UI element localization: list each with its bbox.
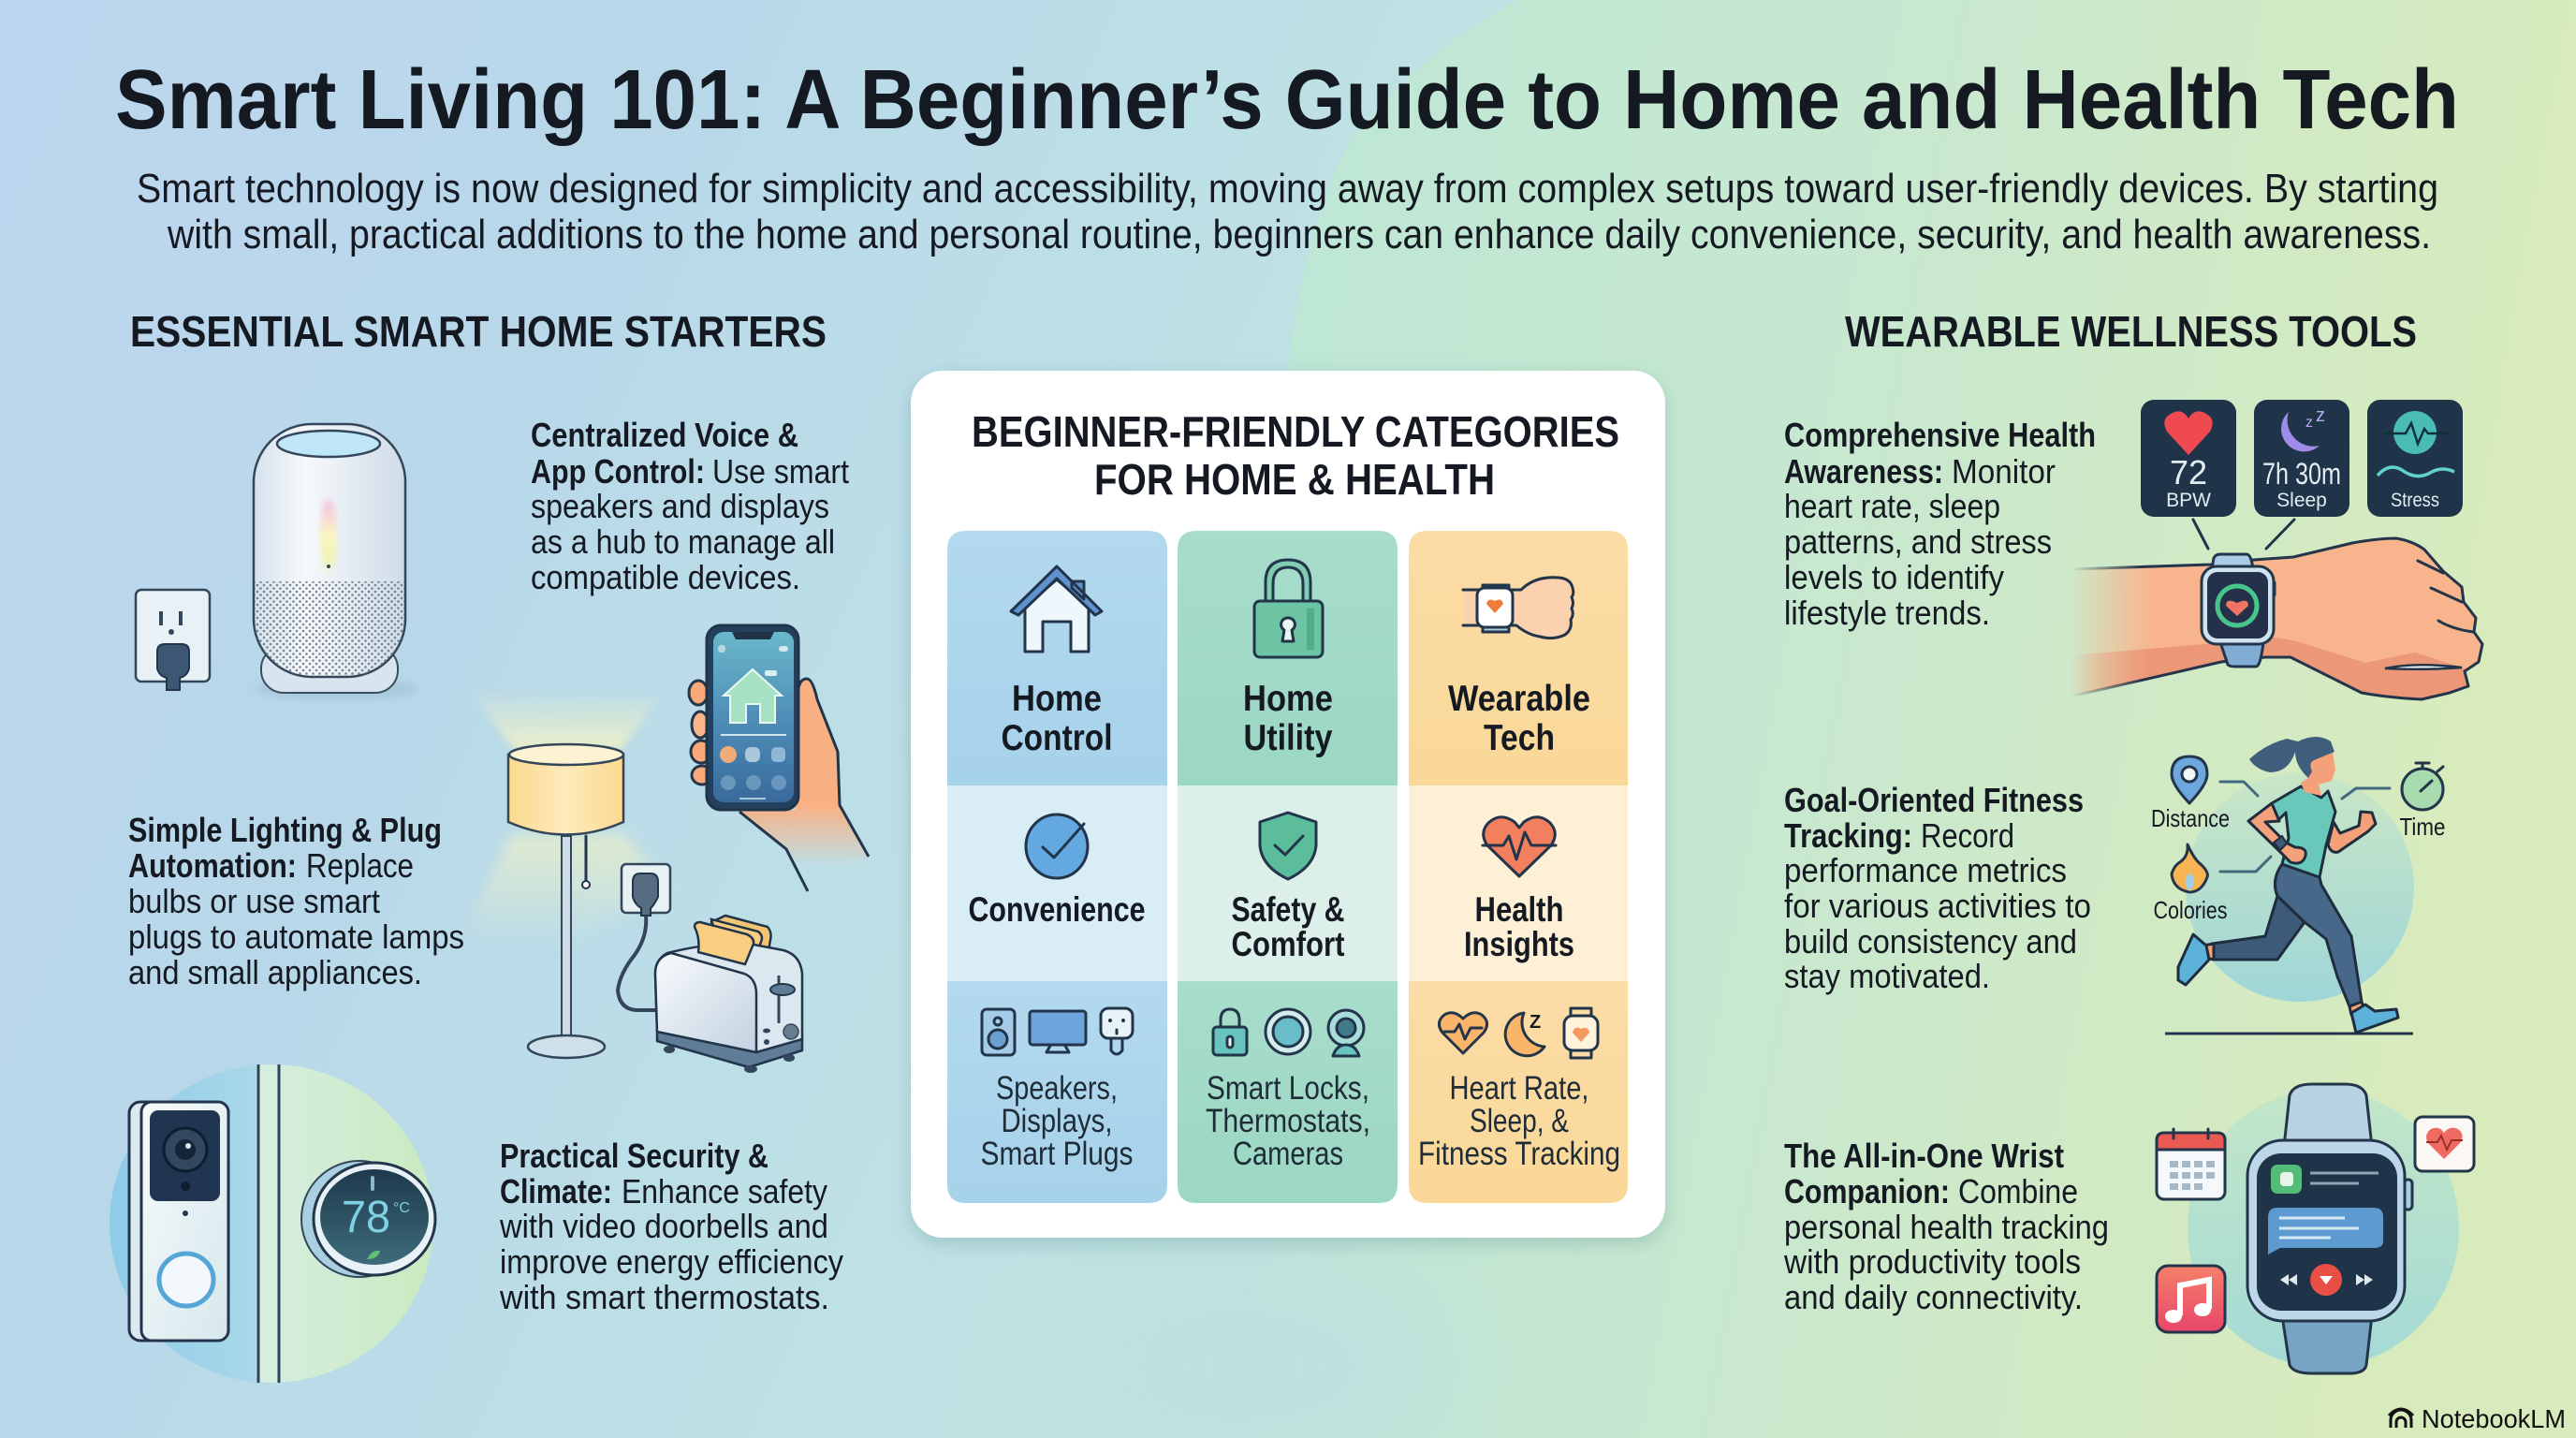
icon: plug socket and cord [618, 864, 670, 1010]
text: comprehensive health awareness: patterns, and stress [1784, 522, 2052, 561]
icon: video doorbell [129, 1102, 228, 1341]
tile: sleep 7h 30m: Sleep [2276, 490, 2327, 511]
label: wearable tech: Wearable [1448, 679, 1590, 719]
text: centralized voice and app control [531, 416, 849, 596]
column: home control [947, 531, 1167, 1203]
tile: stress: Stress [2391, 490, 2439, 511]
label: safety and comfort: Safety & [1232, 890, 1344, 929]
column: wearable tech [1409, 531, 1628, 1203]
label: home control [1002, 679, 1112, 758]
text: comprehensive health awareness: lifestyle trends. [1784, 594, 1990, 632]
label: health insights: Health [1475, 890, 1563, 929]
label: convenience: Convenience [968, 890, 1146, 929]
text: all-in-one wrist companion: with productivity tools [1783, 1242, 2081, 1281]
label: safety and comfort [1232, 890, 1344, 963]
tile: heart rate 72 BPW: BPW [2166, 490, 2211, 511]
icon: shield [1260, 813, 1316, 879]
icon: smartwatch with apps [2157, 1084, 2474, 1373]
text: simple lighting and plug automation: Automation: [128, 846, 297, 885]
text: speakers, displays, smart plugs: Smart Plugs [981, 1136, 1133, 1172]
text: comprehensive health awareness [1784, 416, 2096, 632]
icon: smart speaker [254, 424, 419, 700]
tile: sleep 7h 30m: z [2305, 415, 2313, 431]
text: goal-oriented fitness tracking: Record [1921, 816, 2014, 855]
runner figure [2178, 737, 2398, 1033]
column: home utility [1178, 531, 1398, 1203]
icon: music app tile [2157, 1266, 2225, 1332]
icons: lock, thermostat, camera [1213, 1009, 1364, 1056]
text: simple lighting and plug automation: Replace [306, 846, 414, 885]
text: practical security and climate: Climate: [500, 1172, 612, 1211]
icon: runner with metrics [2151, 737, 2445, 1034]
panel heading [972, 407, 1619, 504]
icons: heart, moon, watch: Z [1530, 1012, 1541, 1033]
text: practical security and climate [499, 1137, 843, 1316]
text: all-in-one wrist companion: Combine [1958, 1172, 2078, 1211]
text: comprehensive health awareness: levels to identify [1784, 558, 2004, 596]
tile: sleep 7h 30m: 7h 30m [2262, 457, 2341, 491]
label: home utility [1243, 679, 1333, 758]
icons: heart, moon, watch [1439, 1008, 1598, 1058]
text: comprehensive health awareness: Comprehensive Health [1784, 416, 2096, 454]
text: smart locks, thermostats, cameras: Thermostats, [1206, 1103, 1370, 1139]
text: goal-oriented fitness tracking: for various activities to [1784, 887, 2091, 925]
tile: sleep 7h 30m: z [2316, 405, 2325, 426]
icon: hand holding phone [689, 625, 869, 891]
text: speakers, displays, smart plugs [981, 1070, 1133, 1172]
heading: essential smart home starters: ESSENTIAL SMART HOME STARTERS [130, 307, 827, 356]
text: comprehensive health awareness: Monitor [1952, 452, 2056, 491]
text: practical security and climate: with video doorbells and [499, 1207, 828, 1245]
text: simple lighting and plug automation: and small appliances. [128, 953, 422, 991]
text: heart rate, sleep, fitness tracking: Heart Rate, [1449, 1070, 1589, 1107]
text: goal-oriented fitness tracking: stay motivated. [1784, 957, 1990, 995]
text: comprehensive health awareness: heart rate, sleep [1784, 487, 2000, 525]
text: all-in-one wrist companion [1783, 1137, 2109, 1316]
text: speakers, displays, smart plugs: Speakers, [996, 1070, 1118, 1107]
tile: heart rate 72 BPW [2141, 400, 2236, 517]
label: time: Time [2400, 813, 2445, 841]
text: all-in-one wrist companion: The All-in-One Wrist [1784, 1137, 2064, 1175]
icon: wall outlet with plug [136, 590, 210, 690]
text: all-in-one wrist companion: Companion: [1784, 1172, 1950, 1211]
label: home utility: Home [1243, 679, 1333, 719]
text: comprehensive health awareness: Awareness: [1784, 452, 1943, 491]
label: health insights: Insights [1464, 925, 1574, 963]
text: practical security and climate: improve energy efficiency [500, 1242, 843, 1281]
text: smart locks, thermostats, cameras: Cameras [1233, 1136, 1343, 1172]
text: goal-oriented fitness tracking: Tracking: [1784, 816, 1912, 855]
icon: thermostat showing 78: 78 [342, 1193, 390, 1242]
text: simple lighting and plug automation: Simple Lighting & Plug [128, 811, 442, 849]
icon: stopwatch [2402, 763, 2443, 810]
icon: distance pin [2172, 756, 2207, 803]
text: smart locks, thermostats, cameras [1206, 1070, 1370, 1172]
text: speakers, displays, smart plugs: Displays, [1002, 1103, 1112, 1139]
icon: heart app tile [2415, 1117, 2474, 1171]
heading: wearable wellness tools: WEARABLE WELLNESS TOOLS [1845, 307, 2417, 356]
icon: calendar [2157, 1129, 2225, 1199]
icon: toaster [655, 916, 802, 1073]
text: heart rate, sleep, fitness tracking: Fitness Tracking [1418, 1136, 1620, 1172]
panel heading: BEGINNER-FRIENDLY CATEGORIES [972, 407, 1619, 456]
icon: shield check [1275, 836, 1303, 855]
icon: thermostat showing 78: °C [393, 1200, 410, 1216]
connector lines [2193, 520, 2294, 549]
icon: wrist with watch [1463, 578, 1573, 638]
icons: speaker, display, plug [982, 1008, 1133, 1055]
watch [2247, 1084, 2412, 1373]
icon: doorbell and thermostat scene [110, 1064, 435, 1383]
icon: flame [2172, 844, 2207, 892]
text: centralized voice and app control: speakers and displays [531, 487, 829, 525]
text: centralized voice and app control: App Control: [531, 452, 705, 491]
text: centralized voice and app control: as a hub to manage all [531, 522, 835, 561]
text: centralized voice and app control: Use smart [712, 452, 849, 491]
icon: heart with pulse [1483, 817, 1556, 876]
panel heading: FOR HOME & HEALTH [1094, 455, 1495, 504]
label: distance: Distance [2151, 804, 2230, 832]
text: smart locks, thermostats, cameras: Smart Locks, [1207, 1070, 1369, 1107]
label: wearable tech [1448, 679, 1590, 758]
text: goal-oriented fitness tracking: build consistency and [1784, 922, 2077, 961]
panel: beginner-friendly categories [911, 371, 1665, 1238]
intro text [137, 166, 2438, 257]
tile: stress [2367, 400, 2463, 517]
icon: padlock [1254, 560, 1323, 657]
text: simple lighting and plug automation: plugs to automate lamps [128, 917, 464, 956]
text: heart rate, sleep, fitness tracking: Sleep, & [1470, 1103, 1569, 1139]
text: goal-oriented fitness tracking: Goal-Oriented Fitness [1784, 781, 2084, 819]
label: wearable tech: Tech [1484, 718, 1555, 758]
icon: house [1011, 566, 1102, 652]
icon: floor lamp with glow [459, 688, 670, 1058]
text: heart rate, sleep, fitness tracking [1418, 1070, 1620, 1172]
label: home control: Home [1012, 679, 1102, 719]
text: simple lighting and plug automation: bulbs or use smart [128, 882, 380, 920]
text: simple lighting and plug automation [128, 811, 464, 991]
label: home control: Control [1002, 718, 1112, 758]
label: home utility: Utility [1243, 718, 1333, 758]
text: all-in-one wrist companion: and daily connectivity. [1784, 1278, 2083, 1316]
title: Smart Living 101: A Beginner’s Guide to Home and Health Tech [115, 53, 2459, 147]
tile: sleep 7h 30m [2254, 400, 2349, 517]
text: goal-oriented fitness tracking: performance metrics [1784, 851, 2067, 889]
icon: check circle [1026, 814, 1088, 878]
label: safety and comfort: Comfort [1232, 925, 1344, 963]
tile: heart rate 72 BPW: 72 [2170, 453, 2207, 492]
text: practical security and climate: Practical Security & [500, 1137, 768, 1175]
text: all-in-one wrist companion: personal health tracking [1784, 1208, 2109, 1246]
text: practical security and climate: Enhance safety [622, 1172, 827, 1211]
icon: thermostat showing 78 [301, 1161, 435, 1277]
text: practical security and climate: with smart thermostats. [499, 1278, 829, 1316]
icon: arm with smartwatch [2071, 538, 2482, 699]
text: centralized voice and app control: compatible devices. [531, 558, 800, 596]
label: health insights [1464, 890, 1574, 963]
text: goal-oriented fitness tracking [1784, 781, 2091, 995]
label: colories: Colories [2153, 896, 2228, 924]
logo: NotebookLM: NotebookLM [2422, 1404, 2566, 1433]
text: centralized voice and app control: Centralized Voice & [531, 416, 798, 454]
